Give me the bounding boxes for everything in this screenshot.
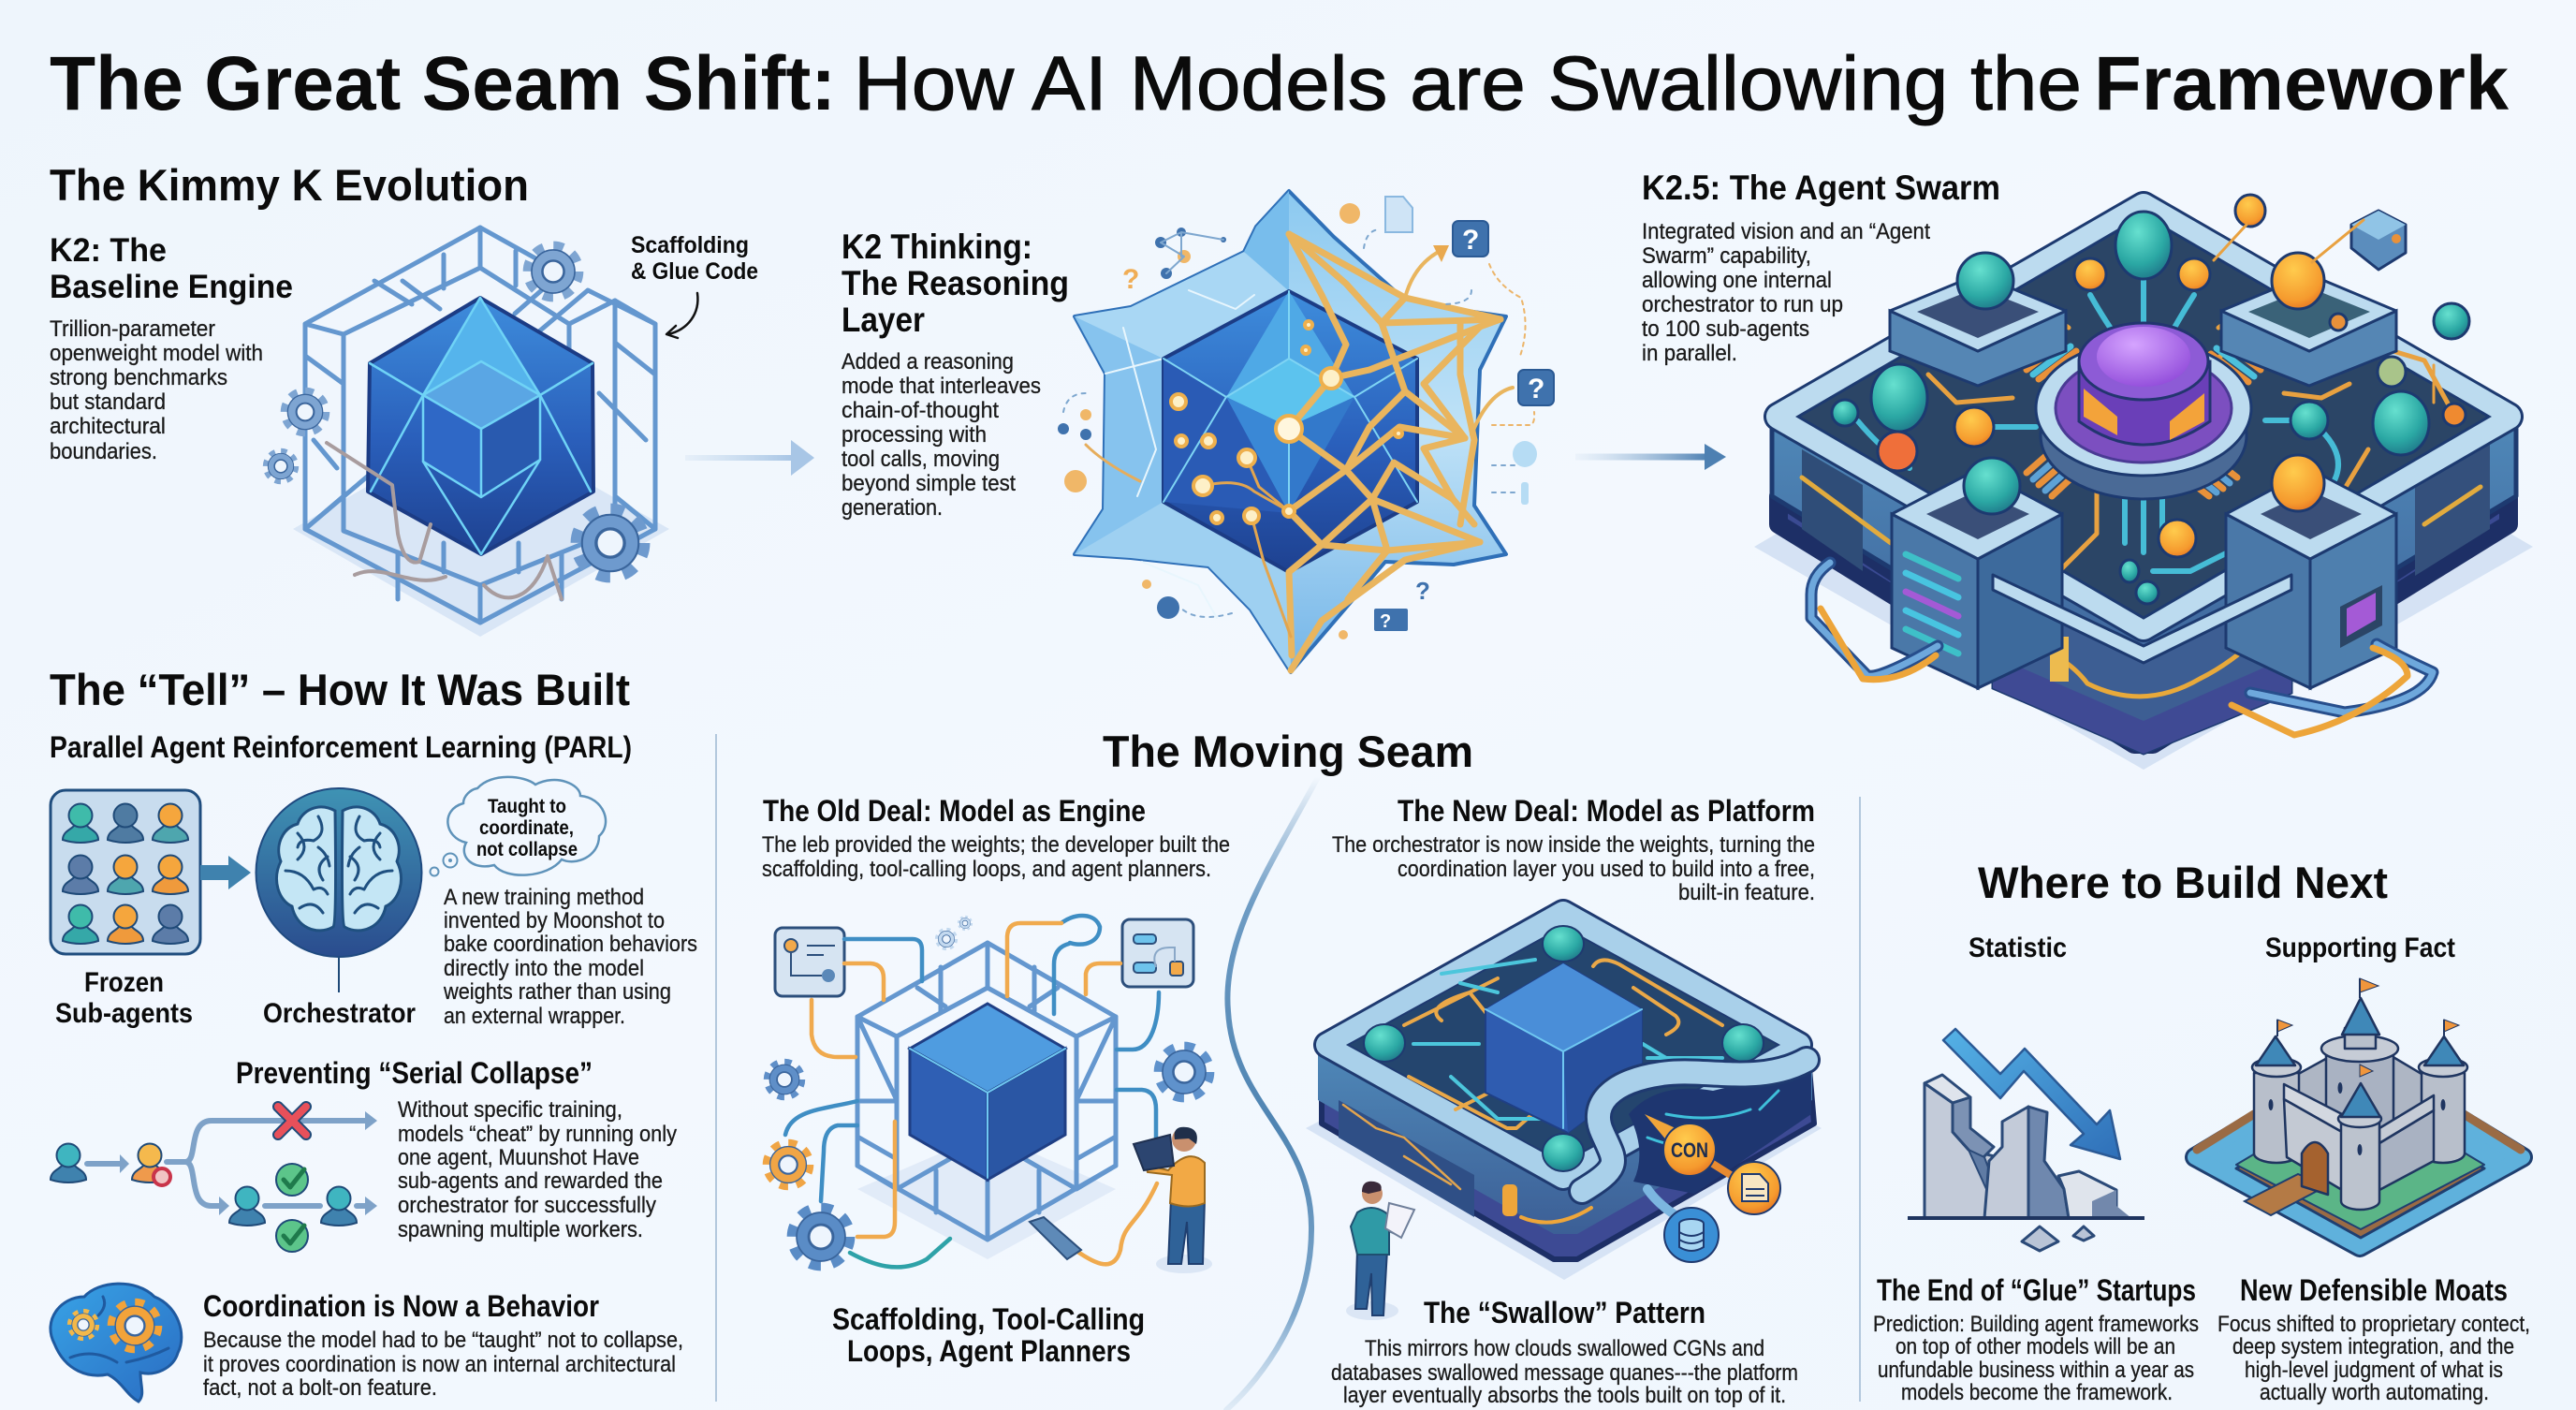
- arrow: K2 Thinking to K2.5: [1575, 444, 1726, 470]
- text block: PARL description: an external wrapper.: [444, 1004, 625, 1029]
- label: Statistic: Statistic: [1969, 933, 2067, 963]
- text block: Coordination is Now a Behavior: Coordination is Now a Behavior: [203, 1289, 599, 1323]
- text block: K2 Thinking: The Reasoning: [842, 264, 1069, 302]
- text block: serial collapse description: [398, 1097, 677, 1242]
- text block: serial collapse description: Without specific training,: [398, 1097, 622, 1123]
- text block: PARL description: A new training method: [444, 885, 644, 910]
- text block: The Swallow Pattern: [1331, 1296, 1798, 1408]
- text block: K2 Thinking: processing with: [842, 422, 987, 448]
- text block: K2.5 Agent Swarm: Swarm” capability,: [1642, 243, 1811, 269]
- text block: K2 Thinking: mode that interleaves: [842, 374, 1041, 399]
- text block: The New Deal: built-in feature.: [1678, 880, 1815, 905]
- text block: PARL description: weights rather than using: [443, 979, 671, 1005]
- callout: thought cloud: coordinate,: [479, 817, 574, 839]
- text block: K2 Thinking: K2 Thinking:: [842, 228, 1032, 266]
- label: Orchestrator: Orchestrator: [263, 998, 416, 1029]
- text block: The New Deal: coordination layer you used to build into a free,: [1398, 857, 1815, 882]
- text block: The Swallow Pattern: This mirrors how clouds swallowed CGNs and: [1365, 1336, 1764, 1361]
- text block: Coordination is Now a Behavior: Because the model had to be “taught” not to collapse,: [203, 1328, 683, 1353]
- text block: K2 Thinking: generation.: [842, 495, 943, 521]
- text block: The Old Deal: The leb provided the weights; the developer built the: [762, 832, 1230, 858]
- text block: K2 Thinking: Added a reasoning: [842, 349, 1014, 375]
- text block: K2 Baseline Engine: Trillion-parameter: [50, 316, 215, 342]
- subheading: Preventing Serial Collapse: Preventing “Serial Collapse”: [236, 1056, 593, 1090]
- connector line: [338, 958, 340, 992]
- label: Frozen Sub-agents: Sub-agents: [55, 998, 193, 1029]
- tool panel left: [775, 928, 844, 996]
- illustration: crystal cube with gold reasoning web: ?: [1122, 264, 1139, 295]
- illustration: falling arrow over crumbling rock: [1908, 1029, 2144, 1251]
- seam curve: [1226, 777, 1318, 1410]
- text block: PARL description: bake coordination behaviors: [444, 932, 697, 957]
- illustration: crystal cube with gold reasoning web: ?: [1462, 225, 1479, 256]
- text block: The Old Deal: [762, 794, 1230, 882]
- text block: New Defensible Moats: actually worth automating.: [2260, 1380, 2489, 1405]
- text block: PARL description: [443, 885, 697, 1029]
- text block: K2 Thinking: beyond simple test: [842, 471, 1016, 496]
- callout: Scaffolding & Glue Code: [631, 232, 758, 338]
- title: How AI Models are Swallowing the: [854, 41, 2082, 126]
- text block: K2 Baseline Engine: but standard: [50, 389, 166, 415]
- developer figure: [1134, 1127, 1212, 1273]
- tool panel right: [1122, 919, 1193, 987]
- illustration: crystal cube with gold reasoning web: ?: [1415, 577, 1430, 605]
- text block: K2.5 Agent Swarm: K2.5: The Agent Swarm: [1642, 169, 2000, 207]
- illustration: agent swarm platform: [1754, 195, 2533, 770]
- callout: thought cloud: [431, 777, 606, 876]
- text block: The End of Glue Startups: [1873, 1273, 2199, 1405]
- text block: New Defensible Moats: [2217, 1273, 2530, 1405]
- corner compute blocks: [1890, 274, 2396, 688]
- CON badge: [1663, 1124, 1716, 1176]
- title: [50, 41, 2509, 126]
- text block: PARL description: invented by Moonshot to: [444, 908, 665, 933]
- illustration: crystal cube with gold reasoning web: [1058, 191, 1554, 672]
- callout: Scaffolding & Glue Code: & Glue Code: [631, 258, 758, 285]
- text block: The New Deal: The New Deal: Model as Platform: [1398, 794, 1815, 828]
- illustration: crystal cube with gold reasoning web: ?: [1380, 611, 1391, 632]
- text block: serial collapse description: models “cheat” by running only: [398, 1122, 677, 1147]
- text block: K2 Baseline Engine: strong benchmarks: [50, 365, 227, 390]
- text block: serial collapse description: one agent, Muunshot Have: [398, 1145, 639, 1170]
- text block: K2.5 Agent Swarm: allowing one internal: [1642, 268, 1832, 293]
- text block: K2 Thinking: chain-of-thought: [842, 398, 999, 423]
- text block: Coordination is Now a Behavior: fact, not a bolt-on feature.: [203, 1375, 437, 1401]
- text block: K2 Baseline Engine: Baseline Engine: [50, 269, 293, 305]
- text block: Coordination is Now a Behavior: [203, 1289, 683, 1401]
- illustration: castle with moat: [2195, 978, 2523, 1247]
- illustration: model as platform: [1306, 913, 1822, 1320]
- callout: thought cloud: not collapse: [476, 839, 578, 860]
- swallowing notch: [1582, 1060, 1811, 1222]
- label: Supporting Fact: Supporting Fact: [2265, 933, 2455, 963]
- illustration: old deal scaffold with tools: [767, 916, 1212, 1273]
- text block: serial collapse description: sub-agents and rewarded the: [398, 1168, 663, 1194]
- text block: serial collapse description: spawning multiple workers.: [398, 1217, 643, 1242]
- text block: The End of Glue Startups: Prediction: Building agent frameworks: [1873, 1312, 2199, 1337]
- text block: The End of Glue Startups: models become the framework.: [1901, 1380, 2173, 1405]
- database badge: [1664, 1208, 1719, 1262]
- icon: brain with gears: [51, 1284, 182, 1402]
- text block: The New Deal: The orchestrator is now inside the weights, turning the: [1332, 832, 1815, 858]
- text block: K2 Thinking: [842, 228, 1069, 521]
- text block: K2 Thinking: tool calls, moving: [842, 447, 1000, 472]
- arrow: sub-agents to orchestrator: [200, 856, 251, 889]
- central orchestrator hub: [2036, 323, 2251, 499]
- text block: PARL description: directly into the model: [444, 956, 644, 981]
- text block: The Swallow Pattern: layer eventually absorbs the tools built on top of it.: [1343, 1383, 1786, 1408]
- text block: The Swallow Pattern: databases swallowed message quanes---the platform: [1331, 1360, 1798, 1386]
- illustration: crystal cube with gold reasoning web: ?: [1528, 374, 1544, 404]
- text block: K2.5 Agent Swarm: [1642, 169, 2000, 366]
- text block: K2 Baseline Engine: boundaries.: [50, 439, 157, 464]
- text block: The Old Deal: The Old Deal: Model as Engine: [763, 794, 1146, 828]
- floating cube: [2214, 211, 2434, 403]
- subheading: PARL: Parallel Agent Reinforcement Learning (PARL): [50, 730, 632, 764]
- text block: serial collapse description: orchestrator for successfully: [398, 1193, 656, 1218]
- CON badge: CON: [1671, 1138, 1708, 1162]
- document badge: [1728, 1162, 1780, 1214]
- heading: The Moving Seam: The Moving Seam: [1103, 727, 1473, 776]
- text block: K2 Baseline Engine: K2: The: [50, 232, 167, 269]
- text block: The End of Glue Startups: The End of “Glue” Startups: [1877, 1273, 2196, 1307]
- text block: K2 Baseline Engine: [50, 232, 293, 464]
- caption: Scaffolding, Tool-Calling Loops, Agent Planners: [832, 1302, 1145, 1368]
- heading: The Kimmy K Evolution: The Kimmy K Evolution: [50, 160, 529, 210]
- text block: K2 Baseline Engine: openweight model with: [50, 341, 263, 366]
- text block: K2.5 Agent Swarm: to 100 sub-agents: [1642, 316, 1809, 342]
- text block: The New Deal: [1332, 794, 1815, 905]
- callout: thought cloud: Taught to: [488, 796, 566, 817]
- heading: Where to Build Next: Where to Build Next: [1978, 858, 2388, 907]
- observer figure: [1346, 1182, 1414, 1320]
- text block: New Defensible Moats: high-level judgment of what is: [2245, 1358, 2503, 1383]
- sub-agent nodes: [1832, 195, 2469, 604]
- arrow: K2 to K2 Thinking: [685, 440, 814, 476]
- callout: Scaffolding & Glue Code: Scaffolding: [631, 232, 749, 258]
- label: Frozen Sub-agents: [55, 967, 193, 1029]
- text block: The End of Glue Startups: on top of other models will be an: [1895, 1334, 2175, 1359]
- panel: frozen sub-agents grid: [51, 790, 200, 954]
- title: The Great Seam Shift:: [50, 41, 836, 126]
- text block: Coordination is Now a Behavior: it proves coordination is now an internal architectural: [203, 1352, 676, 1377]
- diagram: serial collapse branches: [51, 1107, 377, 1252]
- text block: K2.5 Agent Swarm: orchestrator to run up: [1642, 292, 1843, 317]
- text block: New Defensible Moats: deep system integration, and the: [2232, 1334, 2514, 1359]
- text block: The Old Deal: scaffolding, tool-calling loops, and agent planners.: [762, 857, 1211, 882]
- text block: K2 Thinking: Layer: [842, 301, 925, 339]
- caption: Scaffolding, Tool-Calling Loops, Agent Planners: Scaffolding, Tool-Calling: [832, 1302, 1145, 1336]
- cable loops: [1811, 563, 2433, 735]
- icon: orchestrator brain: [256, 788, 421, 957]
- heading: The Tell: The “Tell” – How It Was Built: [50, 665, 630, 714]
- text block: New Defensible Moats: New Defensible Moats: [2240, 1273, 2508, 1307]
- text block: K2.5 Agent Swarm: Integrated vision and an “Agent: [1642, 219, 1930, 244]
- text block: The End of Glue Startups: unfundable business within a year as: [1878, 1358, 2194, 1383]
- text block: K2.5 Agent Swarm: in parallel.: [1642, 341, 1737, 366]
- label: Frozen Sub-agents: Frozen: [84, 967, 164, 998]
- caption: Scaffolding, Tool-Calling Loops, Agent Planners: Loops, Agent Planners: [847, 1334, 1131, 1368]
- illustration: K2 cube in scaffold: [266, 228, 669, 637]
- title: Framework: [2094, 41, 2509, 126]
- text block: The Swallow Pattern: The “Swallow” Pattern: [1424, 1296, 1705, 1329]
- text block: K2 Baseline Engine: architectural: [50, 414, 166, 439]
- text block: New Defensible Moats: Focus shifted to proprietary contect,: [2217, 1312, 2530, 1337]
